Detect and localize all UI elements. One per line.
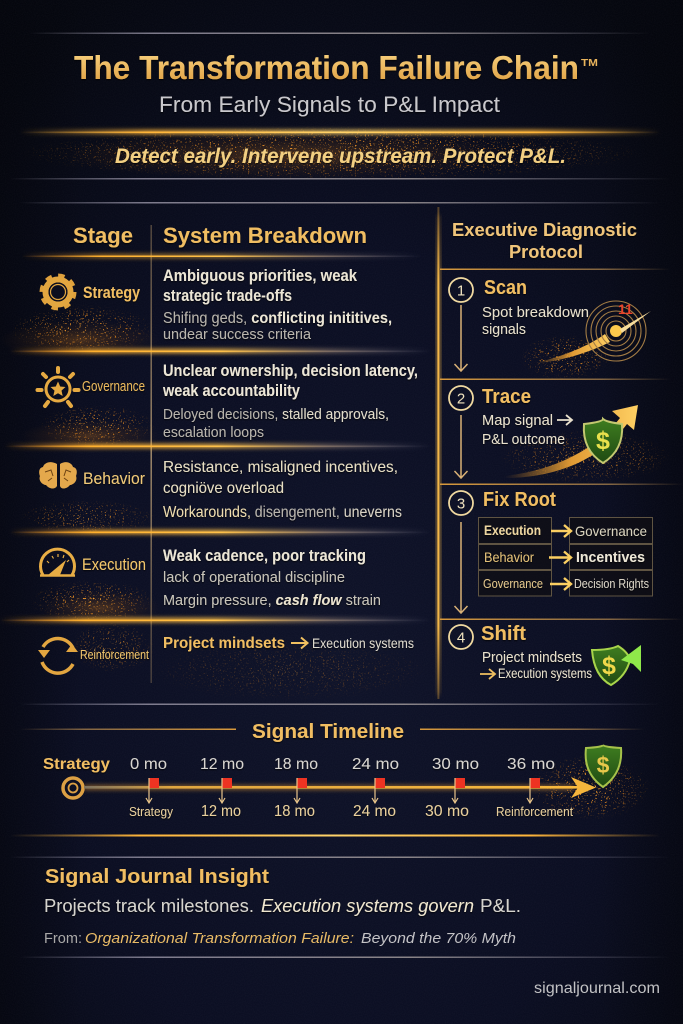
row: execution: Execution <box>82 555 146 574</box>
insight sentence <box>44 896 521 916</box>
root cause mapping table: Governance <box>483 577 543 591</box>
row: strategy: strategic trade-offs <box>163 287 292 305</box>
panel: signal timeline <box>10 704 660 836</box>
table header: Stage <box>73 223 133 248</box>
row: behavior: Resistance, misaligned incentives, <box>163 459 398 476</box>
insight sentence: Projects track milestones. <box>44 896 254 916</box>
row: behavior: cogniöve overload <box>163 480 284 497</box>
table header: System Breakdown <box>163 223 367 248</box>
row: behavior: Workarounds, disengement, uneverns <box>163 504 402 521</box>
icon: shield with dollar <box>584 419 622 463</box>
month labels: 30 mo <box>432 756 479 773</box>
row: governance: weak accountability <box>162 382 301 400</box>
icon: rising arrow <box>505 405 638 478</box>
arrow <box>291 638 308 648</box>
row: reinforcement: Project mindsets <box>163 635 285 652</box>
number badge <box>449 491 473 515</box>
step 1: scan: Spot breakdown <box>482 304 589 321</box>
panel: signal journal insight: Signal Journal Insight <box>45 866 269 888</box>
source line: From: <box>44 931 82 947</box>
step 2: trace <box>449 386 638 478</box>
row: reinforcement <box>38 635 414 673</box>
icon: radar target with comet: 11 <box>618 301 633 317</box>
step 3: fix root <box>449 489 652 613</box>
row: execution: Weak cadence, poor tracking <box>163 547 366 565</box>
icon: reinforcement cycle <box>38 638 78 673</box>
mapping arrows <box>549 525 571 590</box>
stage labels below track: 18 mo <box>274 803 315 820</box>
step 2: trace: Trace <box>482 386 531 408</box>
row: strategy: Ambiguous priorities, weak <box>163 267 358 285</box>
icon: gauge <box>40 549 75 576</box>
row: strategy: Shifing geds, conflicting inititives, <box>163 310 392 327</box>
stage labels below track: Strategy <box>129 805 174 819</box>
root cause mapping table: Governance <box>575 523 647 539</box>
stage labels below track: 30 mo <box>425 803 469 820</box>
icon: shield with green arrow: $ <box>602 652 616 680</box>
step 4: shift: Shift <box>481 623 526 645</box>
month labels: 24 mo <box>352 756 399 773</box>
panel: executive diagnostic protocol <box>440 219 683 685</box>
number badge <box>449 278 473 302</box>
icon: shield with dollar: $ <box>596 427 610 455</box>
root cause mapping table <box>478 518 652 596</box>
step 4: shift: Project mindsets <box>482 650 582 666</box>
panel: stage and system breakdown table <box>0 223 430 683</box>
row: reinforcement: Execution systems <box>312 636 414 651</box>
website url: signaljournal.com <box>534 980 660 997</box>
icon: governance sun star <box>38 368 78 406</box>
timeline track arrow <box>84 777 596 798</box>
number badge: 4 <box>457 630 465 646</box>
timeline start label and target <box>43 756 110 798</box>
step 2: trace: Map signal <box>482 412 553 429</box>
step 1: scan <box>449 277 651 371</box>
root cause mapping table: Execution <box>484 522 541 538</box>
vertical divider <box>436 207 441 699</box>
subtitle: From Early Signals to P&L Impact <box>159 92 500 117</box>
row: execution: Margin pressure, cash flow strain <box>163 592 381 609</box>
heading: Executive Diagnostic <box>452 219 637 240</box>
arrow <box>454 305 468 371</box>
number badge: 2 <box>457 390 465 408</box>
source line: Beyond the 70% Myth <box>361 931 516 947</box>
root cause mapping table: Decision Rights <box>574 577 649 591</box>
row: behavior <box>39 459 402 521</box>
icon: shield <box>586 745 621 787</box>
row: strategy: undear success criteria <box>163 327 312 343</box>
icon: gear <box>42 276 74 308</box>
row: behavior: Behavior <box>83 469 145 488</box>
row: execution: lack of operational discipline <box>163 569 345 586</box>
step 2: trace: P&L outcome <box>482 431 565 448</box>
icon: radar target with comet <box>535 301 651 363</box>
row separators <box>0 349 430 622</box>
number badge: 3 <box>457 496 465 512</box>
heading: Protocol <box>509 241 583 262</box>
month labels: 0 mo <box>130 756 167 773</box>
step 4: shift <box>449 623 641 685</box>
step 1: scan: signals <box>482 321 526 338</box>
step 1: scan: Scan <box>484 277 527 299</box>
arrow <box>454 522 468 613</box>
arrow <box>480 669 495 679</box>
root cause mapping table: Incentives <box>576 550 645 566</box>
flags and drop arrows <box>146 778 540 803</box>
title: The Transformation Failure Chain <box>74 49 579 86</box>
panel: signal journal insight <box>10 856 670 958</box>
stage labels below track <box>129 803 573 820</box>
insight sentence: P&L. <box>480 896 521 916</box>
insight sentence: Execution systems govern <box>261 896 474 916</box>
month labels: 18 mo <box>274 756 318 773</box>
heading <box>440 219 683 620</box>
row: reinforcement: Reinforcement <box>80 647 149 662</box>
number badge <box>449 625 473 649</box>
root cause mapping table: Behavior <box>484 549 534 565</box>
stage labels below track: 24 mo <box>353 803 396 820</box>
row: governance: Deloyed decisions, stalled approvals, <box>163 407 389 423</box>
icon: shield with green arrow <box>592 645 641 685</box>
row: governance <box>38 362 418 441</box>
timeline start label and target: Strategy <box>43 756 110 773</box>
table header <box>22 223 422 683</box>
timeline heading: Signal Timeline <box>252 721 404 743</box>
source line: Organizational Transformation Failure: <box>85 931 354 947</box>
row: governance: Governance <box>82 379 145 395</box>
number badge <box>449 386 473 410</box>
source line <box>44 931 516 947</box>
icon: brain <box>39 462 77 489</box>
row: governance: escalation loops <box>163 425 264 441</box>
title: TM <box>581 58 598 69</box>
header rule lines <box>10 32 670 204</box>
step 3: fix root: Fix Root <box>483 489 556 511</box>
row: execution <box>40 547 381 609</box>
arrow <box>557 415 572 425</box>
row: strategy <box>42 267 392 343</box>
number badge: 1 <box>457 282 465 300</box>
tagline: Detect early. Intervene upstream. Protect P&L. <box>115 145 566 168</box>
month labels: 36 mo <box>507 756 555 773</box>
stage labels below track: 12 mo <box>201 803 241 820</box>
row: governance: Unclear ownership, decision latency, <box>163 362 418 380</box>
month labels <box>130 756 555 773</box>
stage labels below track: Reinforcement <box>496 805 573 819</box>
step 4: shift: Execution systems <box>498 666 592 681</box>
row: strategy: Strategy <box>83 283 140 302</box>
icon: shield: $ <box>597 752 610 778</box>
arrow <box>454 415 468 478</box>
month labels: 12 mo <box>200 756 244 773</box>
